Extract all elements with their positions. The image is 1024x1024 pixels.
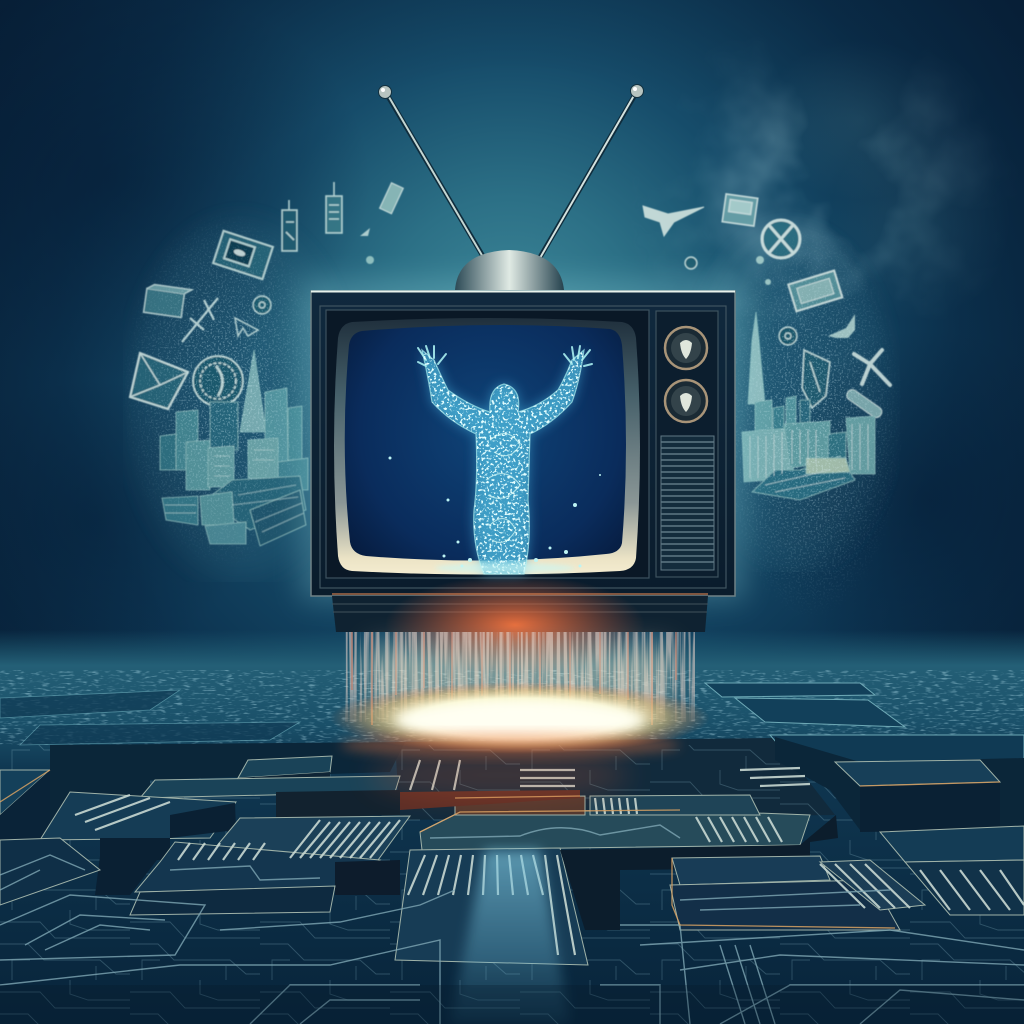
icon: hanging tag — [282, 200, 297, 251]
figure fingers — [418, 346, 592, 366]
glow behind television — [300, 280, 745, 600]
glitch drips below television — [345, 632, 695, 725]
particle dust left — [132, 232, 310, 549]
icon: crossed circle — [762, 220, 800, 258]
background: teal night sky — [0, 0, 1024, 656]
icon: tilted card — [380, 183, 403, 214]
icon: photo card — [213, 231, 273, 279]
floor blocks: far right — [705, 683, 1024, 770]
floor stripes: parallel traces — [75, 760, 1024, 955]
antenna dome — [455, 250, 564, 290]
figure body — [422, 350, 584, 574]
icon: dot left — [366, 256, 374, 264]
icon: cylinder rocket — [845, 388, 884, 420]
skyline: left city — [160, 350, 308, 546]
glowing figure — [388, 340, 601, 580]
screen bezel — [334, 318, 640, 574]
blue light reflection on floor — [450, 850, 570, 1024]
icon: envelope — [130, 353, 188, 409]
bright light pool on floor — [330, 645, 710, 800]
floor blocks: far left — [0, 690, 300, 745]
screen surround — [326, 310, 649, 578]
icon: box — [144, 284, 192, 319]
figure base splash — [388, 456, 601, 568]
icon: tiny bird left — [235, 318, 258, 336]
control knob: bottom — [665, 380, 707, 422]
icon: small dots — [756, 256, 771, 285]
antenna: left — [378, 86, 484, 258]
crt screen — [345, 325, 626, 561]
speaker grille — [661, 436, 714, 570]
orange glow under television — [332, 575, 708, 675]
floor warm glow edges — [0, 770, 1000, 928]
floating left icons and skyline — [130, 182, 403, 580]
icon: round seal — [193, 356, 243, 406]
icon: round knob dot — [685, 257, 697, 269]
icon: coin right — [779, 327, 797, 345]
skyline: window lines right — [750, 424, 868, 492]
icon: coin — [253, 296, 271, 314]
icon: small bird — [360, 228, 370, 236]
floating right icons and skyline — [643, 194, 890, 570]
circuit board floor — [0, 630, 1024, 1024]
icon: shield mask — [802, 350, 830, 408]
icon: figure jumper — [854, 350, 890, 385]
icon: bird plane — [643, 206, 704, 236]
icon: jet — [828, 314, 855, 338]
tv base — [332, 596, 708, 632]
tv control panel — [656, 311, 718, 577]
particle dust right — [736, 247, 894, 597]
floor blocks: raised slabs with dark sides — [0, 737, 1024, 965]
television set — [311, 250, 735, 632]
control knob: top — [665, 327, 707, 369]
icon: tilted screen — [788, 271, 842, 311]
skyline: right city — [742, 312, 875, 500]
icon: satellite dart — [182, 298, 218, 342]
icon: document tag — [326, 182, 342, 233]
tv cabinet — [311, 291, 735, 596]
floor lower circuit traces — [0, 825, 1024, 1024]
antennas — [378, 84, 644, 259]
antenna: right — [539, 84, 644, 259]
skyline: window lines left — [165, 450, 304, 532]
icon: monitor box — [722, 194, 758, 226]
